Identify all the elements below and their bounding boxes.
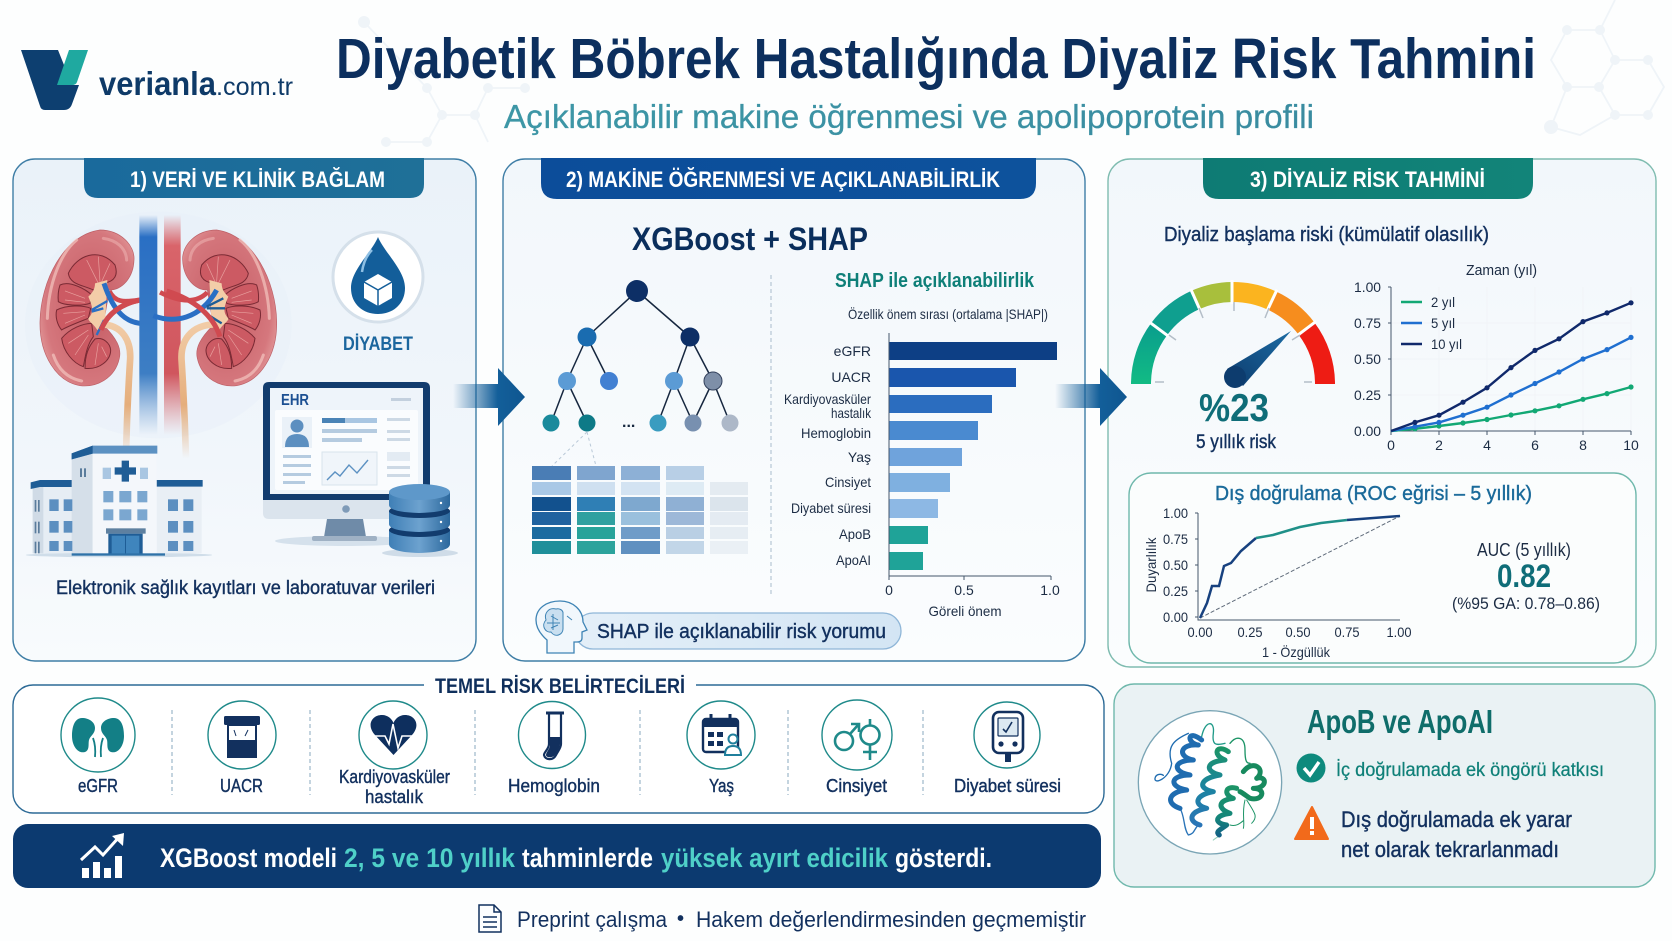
- marker: cardiovascular disease: hastalık: [365, 787, 424, 807]
- SHAP risk interpretation pill: [536, 601, 901, 653]
- illustration: hospital: [26, 446, 212, 557]
- line chart: cumulative risk: 2: [1435, 437, 1443, 453]
- banner text: tahminlerde: [522, 843, 653, 873]
- marker: eGFR: [61, 698, 135, 796]
- logo domain: .com.tr: [216, 73, 293, 101]
- marker: age: [687, 701, 755, 796]
- background molecules: [358, 0, 1664, 147]
- gauge value: %23: [1199, 387, 1269, 430]
- AUC callout: (%95 GA: 0.78–0.86): [1452, 594, 1600, 613]
- bar chart: SHAP importance: Cinsiyet: [825, 474, 871, 490]
- marker: UACR: [208, 701, 276, 796]
- banner text: yüksek ayırt edicilik: [661, 843, 889, 873]
- decision tree: [542, 280, 738, 466]
- footer note: Hakem değerlendirmesinden geçmemiştir: [696, 907, 1086, 932]
- illustration: EHR monitor: EHR: [281, 392, 309, 409]
- logo: [21, 50, 293, 110]
- footer note: •: [677, 908, 684, 930]
- ROC box: [1129, 473, 1636, 663]
- internal validation text: İç doğrulamada ek öngörü katkısı: [1336, 760, 1604, 781]
- footer note: Preprint çalışma: [517, 907, 668, 932]
- illustration: protein structure: [1138, 711, 1282, 854]
- line chart: cumulative risk: 0.25: [1354, 387, 1381, 403]
- banner: main finding: [13, 824, 1101, 888]
- illustration: EHR monitor: [263, 382, 430, 546]
- panel 2 header: 2) MAKİNE ÖĞRENMESİ VE AÇIKLANABİLİRLİK: [566, 167, 1000, 192]
- marker: diabetes duration: [954, 702, 1061, 796]
- arrow: panel 1 to 2: [453, 368, 525, 426]
- bar chart: SHAP importance: [784, 333, 1060, 619]
- external validation text: net olarak tekrarlanmadı: [1341, 837, 1559, 862]
- marker: gender: Cinsiyet: [826, 776, 887, 796]
- ROC chart: Duyarlılık: [1143, 537, 1159, 592]
- panel 3 header: 3) DİYALİZ RİSK TAHMİNİ: [1250, 167, 1485, 192]
- AUC callout: [1452, 540, 1600, 613]
- panel: ApoB ve ApoAI: [1114, 684, 1655, 887]
- bar chart: SHAP importance: Hemoglobin: [801, 425, 871, 441]
- illustration: database: [382, 484, 458, 557]
- marker: cardiovascular disease: [339, 701, 450, 807]
- bar chart: SHAP importance: 0.5: [954, 582, 974, 598]
- diabetes label: DİYABET: [343, 334, 413, 355]
- banner text: 2, 5 ve 10 yıllık: [344, 843, 516, 873]
- bar chart: SHAP importance: hastalık: [831, 405, 872, 421]
- AUC callout: 0.82: [1497, 558, 1551, 594]
- bar chart: SHAP importance: ApoB: [839, 526, 871, 542]
- bar chart: SHAP importance: Göreli önem: [928, 603, 1002, 619]
- icon: check: [1296, 754, 1326, 782]
- ROC chart: 1.00: [1163, 505, 1188, 521]
- gauge caption: 5 yıllık risk: [1196, 432, 1276, 453]
- ROC chart: 0.00: [1188, 624, 1213, 640]
- chart legend: 10 yıl: [1431, 336, 1462, 352]
- marker: gender: [822, 700, 892, 796]
- heading: TEMEL RİSK BELİRTECİLERİ: [435, 675, 685, 698]
- line chart: cumulative risk: Zaman (yıl): [1466, 262, 1537, 279]
- marker: hemoglobin: [508, 702, 600, 796]
- panel 2 header: [541, 158, 1036, 199]
- marker: cardiovascular disease: Kardiyovasküler: [339, 767, 450, 787]
- ApoB heading: ApoB ve ApoAI: [1307, 703, 1493, 740]
- ROC chart: 0.50: [1286, 624, 1311, 640]
- line chart: cumulative risk: 0.75: [1354, 315, 1381, 331]
- AUC callout: AUC (5 yıllık): [1477, 540, 1571, 560]
- logo wordmark: verianla: [99, 65, 217, 102]
- line chart: cumulative risk: 0.00: [1354, 423, 1381, 439]
- ROC chart: 0.25: [1163, 583, 1188, 599]
- chart legend: 5 yıl: [1431, 315, 1455, 331]
- chart heading: Diyaliz başlama riski (kümülatif olasılık): [1164, 224, 1489, 246]
- chart legend: 2 yıl: [1431, 294, 1455, 310]
- icon: document: [479, 905, 501, 932]
- subtitle: Açıklanabilir makine öğrenmesi ve apolipoprotein profili: [504, 98, 1314, 135]
- line chart: cumulative risk: 4: [1483, 437, 1491, 453]
- panel: temel risk belirteçleri: [13, 675, 1104, 813]
- ROC chart: [1143, 505, 1412, 660]
- ROC chart: 0.75: [1163, 531, 1188, 547]
- ROC chart: 0.25: [1238, 624, 1263, 640]
- external validation text: Dış doğrulamada ek yarar: [1341, 807, 1572, 832]
- bar chart: SHAP importance: eGFR: [834, 343, 871, 359]
- panel: veri ve klinik bağlam: [13, 158, 476, 661]
- banner text: XGBoost modeli: [160, 843, 337, 873]
- bar chart: SHAP importance: 1.0: [1040, 582, 1060, 598]
- marker: age: Yaş: [709, 776, 734, 796]
- arrow: panel 2 to 3: [1055, 368, 1127, 426]
- bar chart: SHAP importance: Yaş: [848, 449, 871, 465]
- panel 3 header: [1203, 158, 1533, 199]
- line chart: cumulative risk: 6: [1531, 437, 1539, 453]
- heading: XGBoost + SHAP: XGBoost + SHAP: [632, 221, 868, 257]
- banner text: [160, 843, 992, 873]
- line chart: cumulative risk: 1.00: [1354, 279, 1381, 295]
- ROC heading: Dış doğrulama (ROC eğrisi – 5 yıllık): [1215, 483, 1532, 505]
- line chart: cumulative risk: 8: [1579, 437, 1587, 453]
- ROC chart: 0.50: [1163, 557, 1188, 573]
- chart legend: [1401, 294, 1462, 352]
- panel: makine öğrenmesi: [503, 158, 1085, 661]
- bar chart: SHAP importance: ApoAI: [836, 552, 871, 568]
- external validation text: [1341, 807, 1572, 862]
- ROC chart: 0.75: [1334, 624, 1360, 640]
- ROC chart: 0.00: [1163, 609, 1188, 625]
- banner text: gösterdi.: [895, 843, 992, 873]
- line chart: cumulative risk: [1354, 262, 1639, 453]
- panel 1 header: [84, 158, 424, 198]
- icon: AI head: [536, 601, 587, 653]
- marker: diabetes duration: Diyabet süresi: [954, 776, 1061, 796]
- bar chart: SHAP importance: Diyabet süresi: [791, 500, 871, 516]
- data table heatmap: [532, 466, 748, 554]
- marker: eGFR: eGFR: [78, 776, 118, 796]
- ROC chart: 1.00: [1386, 624, 1412, 640]
- logo mark: [21, 50, 88, 110]
- bar chart: SHAP importance: Kardiyovasküler: [784, 391, 871, 407]
- illustration: kidneys: [25, 212, 292, 458]
- ROC chart: 1 - Özgüllük: [1262, 643, 1331, 660]
- bar chart: SHAP importance: 0: [885, 582, 893, 598]
- panel 1 header: 1) VERİ VE KLİNİK BAĞLAM: [130, 167, 385, 192]
- caption: Elektronik sağlık kayıtları ve laboratuvar verileri: [56, 578, 435, 599]
- icon: growth chart: [81, 833, 124, 878]
- marker: UACR: UACR: [220, 776, 263, 796]
- bar chart caption: Özellik önem sırası (ortalama |SHAP|): [848, 305, 1048, 322]
- icon: warning: [1295, 807, 1328, 839]
- icon: diabetes drop: [333, 232, 423, 322]
- SHAP risk interpretation pill: SHAP ile açıklanabilir risk yorumu: [597, 621, 886, 643]
- decision tree: ...: [622, 414, 635, 431]
- heading: SHAP explainability: SHAP ile açıklanabilirlik: [835, 270, 1035, 292]
- bar chart: SHAP importance: UACR: [831, 369, 871, 385]
- marker: hemoglobin: Hemoglobin: [508, 776, 600, 796]
- line chart: cumulative risk: 0.50: [1354, 351, 1381, 367]
- line chart: cumulative risk: 0: [1387, 437, 1395, 453]
- footer note: [479, 905, 1086, 932]
- risk gauge: [1141, 280, 1325, 388]
- panel: diyaliz risk tahmini: [1108, 158, 1656, 667]
- line chart: cumulative risk: 10: [1623, 437, 1639, 453]
